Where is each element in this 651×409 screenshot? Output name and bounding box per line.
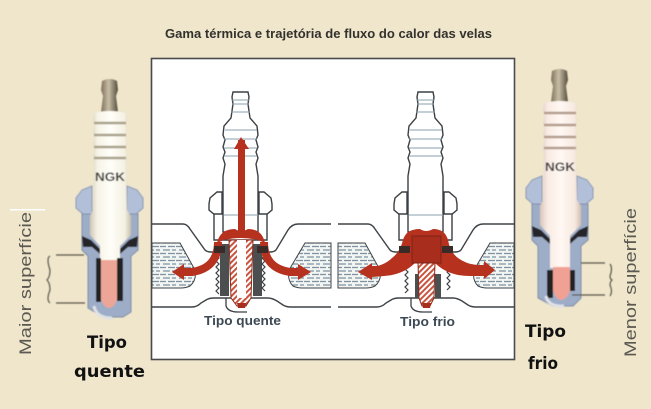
red block detail — [412, 236, 441, 263]
terminal — [551, 69, 568, 102]
NGK mark: NGK — [545, 162, 576, 174]
panel: heat flow diagrams — [152, 58, 515, 360]
pink tip — [553, 267, 570, 300]
cylinder head outline — [152, 224, 331, 307]
thread and cavity — [415, 274, 441, 298]
red heat flow — [358, 229, 495, 280]
dark cavity — [96, 258, 123, 302]
surface bracket — [47, 255, 85, 303]
dark cavity — [547, 270, 575, 298]
shell nut — [526, 176, 593, 205]
water jacket right — [474, 243, 514, 288]
thread and cavity — [220, 244, 262, 296]
surface bracket — [572, 263, 612, 296]
red heat flow — [172, 137, 311, 280]
insulator ribs — [94, 123, 126, 158]
spark plug photo: hot type — [47, 79, 143, 318]
terminal — [101, 79, 118, 112]
ground electrode — [546, 296, 564, 306]
label: tipo (hot): Tipo — [87, 333, 127, 353]
metal shell — [532, 204, 588, 306]
ground electrode — [94, 306, 112, 318]
metal shell — [82, 214, 138, 317]
dark gasket — [214, 246, 268, 253]
hatched insulator tip — [229, 240, 253, 306]
shoulder shadow — [532, 226, 588, 244]
label: tipo quente: Tipo quente — [204, 314, 281, 328]
insulator — [90, 111, 131, 262]
shoulder shadow — [82, 236, 138, 254]
hatched insulator tip — [418, 262, 435, 306]
dark gasket — [399, 246, 453, 253]
pink tip — [101, 260, 117, 308]
NGK mark: NGK — [95, 172, 126, 184]
label: maior superficie: Maior superfície — [16, 212, 35, 355]
diagram: hot type plug — [152, 92, 331, 328]
ground electrode — [226, 298, 247, 312]
label: frio: frio — [528, 354, 558, 374]
water jacket left — [338, 243, 380, 288]
plug outline — [394, 92, 457, 240]
cylinder head outline — [338, 224, 515, 307]
insulator ribs — [544, 113, 576, 148]
shell nut — [76, 186, 143, 215]
label: tipo (cold): Tipo — [525, 322, 566, 342]
label: menor superficie: Menor superfície — [621, 208, 640, 357]
white rule above label — [10, 209, 45, 210]
water jacket right — [288, 243, 331, 288]
ground electrode — [411, 298, 432, 312]
label: tipo frio: Tipo frio — [400, 315, 455, 329]
title: Gama térmica e trajetória de fluxo do calor das velas — [165, 27, 492, 41]
spark plug photo: cold type — [526, 69, 612, 306]
water jacket left — [152, 243, 195, 288]
label: quente: quente — [74, 362, 145, 382]
plug outline — [209, 92, 272, 240]
insulator — [540, 101, 581, 268]
diagram: cold type plug — [338, 92, 515, 329]
